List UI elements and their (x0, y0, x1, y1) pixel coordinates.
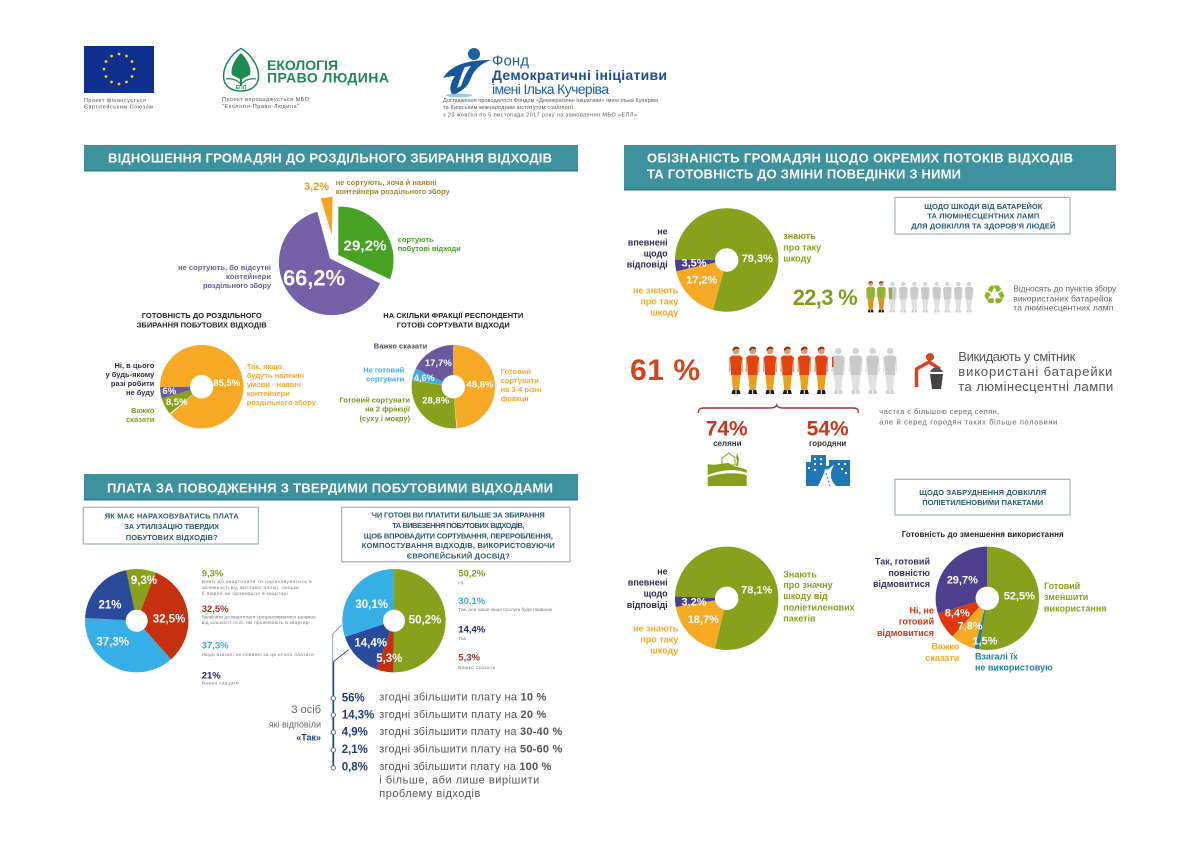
labels: battery harm pie: шкоду (783, 254, 811, 264)
chart: main exploded pie: 66,2% (283, 266, 345, 290)
legend: fee charging: 9,3% (202, 568, 224, 580)
list: agreement to raise the fee: 2,1% (342, 744, 368, 756)
labels: main pie: контейнери (226, 272, 271, 281)
labels: readiness donut: контейнери (247, 389, 290, 398)
text: take to collection points: та люмінесцентних ламп (1013, 302, 1114, 312)
question box: how fee should be charged (83, 507, 258, 544)
stat: villagers: 74% (706, 418, 748, 440)
legend: ready to pay: 14,4% (458, 624, 486, 636)
chart: fractions donut: 48,8% (467, 380, 494, 390)
chart: readiness donut (162, 349, 241, 424)
chart: reduce use pie: 1,5% (972, 636, 998, 648)
question box: ready to pay more: ЄВРОПЕЙСЬКИЙ ДОСВІД? (407, 552, 510, 560)
logo: Democratic Initiatives Foundation: Дослідження проводилося Фондом «Демократичні Ініціативи» імені Ілька Кучеріва (443, 98, 659, 104)
question box: batteries and lamps (895, 197, 1070, 234)
list: agreement to raise the fee: згодні збільшити плату на 30-40 % (379, 726, 563, 738)
labels: plastic bag harm pie: відповіді (627, 600, 668, 610)
labels: reduce use pie: відмовитися (873, 579, 930, 589)
labels: plastic bag harm pie (627, 567, 855, 656)
labels: main pie: контейнери роздільного збору (336, 187, 451, 196)
chart: plastic bag harm pie: 78,1% (741, 585, 773, 597)
heading: attitude to separate collection (84, 145, 578, 172)
label: of those who answered yes (269, 704, 321, 742)
legend: ready to pay: 30,1% (458, 596, 486, 607)
question box: ready to pay more (342, 507, 570, 562)
heading: readiness for separate collection: ЗБИРАННЯ ПОБУТОВИХ ВІДХОДІВ (137, 320, 267, 330)
stat: villagers: селяни (713, 439, 742, 448)
labels: battery harm pie: про таку (783, 242, 821, 252)
legend: ready to pay: Важко сказати (458, 665, 496, 671)
list: agreement to raise the fee: 0,8% (342, 762, 368, 774)
list: agreement to raise the fee: згодні збільшити плату на 50-60 % (379, 744, 563, 756)
heading: awareness about waste streams (624, 145, 1116, 190)
legend: ready to pay (458, 568, 553, 671)
list: agreement to raise the fee: згодні збільшити плату на 20 % (379, 709, 547, 721)
label: of those who answered yes: «Так» (296, 732, 321, 742)
text: share note: але й серед городян таких більше половини (879, 418, 1057, 426)
chart: plastic bag harm pie: 3,2% (681, 596, 707, 608)
labels: reduce use pie: Важко (932, 642, 960, 652)
labels: main pie: роздільного збору (203, 281, 272, 290)
logo: Democratic Initiatives Foundation: Демократичні ініціативи (492, 67, 667, 83)
legend: fee charging: Включити до квартплати і розраховуватися залежно (202, 614, 316, 620)
labels: readiness donut (106, 361, 317, 424)
legend: fee charging: Люди взагалі не повинні за це нічого платити (202, 652, 314, 658)
legend: fee charging: 21% (202, 670, 221, 682)
labels: main pie: не сортують, хоча й наявні (336, 178, 437, 187)
chart: battery harm awareness pie: 79,3% (742, 253, 773, 265)
labels: reduce use pie: готовий (899, 617, 934, 627)
labels: battery harm pie: шкоду (650, 307, 678, 317)
labels: reduce use pie: використання (1044, 603, 1107, 613)
labels: battery harm pie: про таку (640, 297, 678, 307)
logo: European Union: Проект фінансується (84, 98, 146, 104)
question box: batteries and lamps: ЩОДО ШКОДИ ВІД БАТАРЕЙОК (924, 202, 1043, 211)
heading: number of fractions: НА СКІЛЬКИ ФРАКЦІЇ РЕСПОНДЕНТИ (383, 311, 523, 320)
question box: ready to pay more: ТА ВИВЕЗЕННЯ ПОБУТОВИХ ВІДХОДІВ, (392, 521, 524, 530)
question box: ready to pay more: ЧИ ГОТОВІ ВИ ПЛАТИТИ БІЛЬШЕ ЗА ЗБИРАННЯ (372, 510, 545, 520)
list: agreement to raise the fee: і більше, аби лише вирішити (379, 775, 539, 787)
label: of those who answered yes: З осіб (291, 704, 321, 716)
text: share note: частка є більшою серед селян, (879, 407, 999, 416)
labels: battery harm pie: впевнені (628, 238, 668, 248)
logo: Ecology Law Human: ЕКОЛОГІЯ (267, 57, 338, 73)
labels: readiness donut: роздільного збору (247, 398, 317, 407)
chart: fee charging pie: 21% (98, 600, 122, 612)
heading: readiness for separate collection (137, 311, 267, 330)
labels: fractions donut (339, 342, 541, 423)
list: agreement to raise the fee: згодні збільшити плату на 100 % (379, 761, 552, 773)
list: agreement to raise the fee: 14,3% (342, 710, 374, 722)
chart: plastic bag harm pie: 18,7% (688, 614, 719, 626)
pictogram: 61 percent of people (729, 347, 897, 394)
question box: how fee should be charged: ЗА УТИЛІЗАЦІЮ ТВЕРДИХ (124, 522, 219, 531)
labels: battery harm pie: не знають (633, 286, 679, 296)
labels: plastic bag harm pie: поліетиленових (783, 602, 855, 612)
labels: readiness donut: не буду (126, 388, 155, 397)
labels: reduce use pie (873, 557, 1107, 673)
labels: main pie: 3,2% (304, 181, 329, 193)
legend: ready to pay: Так, але лише якщо послуга буде наявною (458, 607, 553, 613)
labels: fractions donut: на 2 фракції (365, 404, 411, 414)
pictogram: 22.3 percent of people (866, 281, 974, 312)
labels: plastic bag harm pie: щодо (644, 589, 668, 599)
labels: main pie (178, 178, 461, 290)
labels: readiness donut: сказати (126, 415, 155, 424)
logo: Ecology Law Human: ЕПЛ (236, 85, 247, 91)
labels: readiness donut: умови - наявні (247, 380, 301, 389)
logo: European Union: Європейським Союзом (84, 104, 153, 110)
question box: how fee should be charged: ПОБУТОВИХ ВІДХОДІВ? (126, 533, 218, 542)
labels: fractions donut: Важко сказати (374, 342, 428, 350)
chart: ready to pay pie: 50,2% (409, 615, 441, 627)
heading: readiness to reduce use: Готовність до зменшення використання (902, 530, 1064, 539)
chart: reduce use pie: 52,5% (1004, 591, 1035, 603)
labels: plastic bag harm pie: шкоду від (783, 591, 828, 601)
labels: main pie: не сортують, бо відсутні (178, 263, 271, 272)
labels: battery harm pie: не (657, 226, 668, 236)
chart: fee charging pie (92, 575, 185, 665)
labels: plastic bag harm pie: не знають (633, 623, 679, 633)
legend: fee charging: залежності від житлової площі, скільки (202, 585, 299, 591)
labels: reduce use pie: Взагалі їх (975, 652, 1018, 662)
question box: ready to pay more: ЩОБ ВПРОВАДИТИ СОРТУВАННЯ, ПЕРЕРОБЛЕННЯ, (364, 532, 553, 540)
legend: fee charging: 32,5% (202, 604, 229, 615)
stat: city dwellers: 54% (807, 418, 849, 440)
question box: ready to pay more: КОМПОСТУВАННЯ ВІДХОДІВ, ВИКОРИСТОВУЮЧИ (362, 541, 555, 550)
chart: main exploded pie: 29,2% (344, 238, 386, 254)
chart: ready to pay pie: 5,3% (376, 653, 402, 665)
chart: readiness donut: 6% (162, 386, 177, 397)
question box: plastic bags: ПОЛІЕТИЛЕНОВИМИ ПАКЕТАМИ (922, 498, 1043, 507)
logo: Democratic Initiatives Foundation (443, 48, 667, 118)
question box: how fee should be charged: ЯК МАЄ НАРАХОВУВАТИСЬ ПЛАТА (105, 512, 239, 520)
labels: plastic bag harm pie: про значну (783, 580, 833, 590)
question box: batteries and lamps: ДЛЯ ДОВКІЛЛЯ ТА ЗДОРОВ'Я ЛЮДЕЙ (911, 222, 1055, 230)
chart: battery harm awareness pie: 3,5% (681, 257, 707, 269)
chart: readiness donut: 8,5% (166, 397, 188, 408)
chart: fractions donut: 4,6% (414, 373, 435, 383)
legend: fee charging (202, 568, 316, 686)
chart: plastic bag harm pie (681, 560, 773, 636)
labels: plastic bag harm pie: Знають (783, 569, 817, 579)
text: share note (879, 407, 1057, 426)
heading: readiness for separate collection: ГОТОВНІСТЬ ДО РОЗДІЛЬНОГО (142, 311, 262, 320)
chart: ready to pay pie: 14,4% (354, 637, 387, 649)
chart: reduce use pie: 29,7% (947, 575, 978, 587)
icon: city (806, 455, 850, 486)
chart: fee charging pie: 9,3% (131, 575, 157, 587)
labels: fractions donut: Готовий сортувати (339, 396, 410, 404)
stat: city dwellers: городяни (809, 439, 846, 448)
text: throw batteries in the bin: Викидають у смітник (958, 349, 1076, 364)
labels: battery harm pie: знають (783, 231, 816, 241)
list: agreement to raise the fee: 56% (342, 692, 365, 704)
list: agreement to raise the fee: згодні збільшити плату на 10 % (379, 692, 547, 704)
chart: battery harm awareness pie: 17,2% (686, 275, 718, 287)
labels: battery harm pie: відповіді (627, 259, 668, 269)
logo: Ecology Law Human: ПРАВО ЛЮДИНА (267, 70, 389, 86)
logo: European Union (84, 46, 154, 110)
text: take to collection points (1013, 283, 1117, 312)
labels: reduce use pie: Так, готовий (875, 557, 930, 567)
labels: reduce use pie: відмовитися (877, 628, 934, 638)
labels: main pie: побутові відходи (398, 244, 461, 253)
logo: Ecology Law Human: Проект впроваджується МБО (222, 97, 310, 103)
chart: fee charging pie: 32,5% (153, 613, 185, 625)
labels: plastic bag harm pie: шкоду (650, 646, 678, 656)
heading: awareness about waste streams: ТА ГОТОВНІСТЬ ДО ЗМІНИ ПОВЕДІНКИ З НИМИ (647, 166, 961, 182)
labels: fractions donut: на 3-4 різні (501, 385, 541, 394)
labels: reduce use pie: не використовую (975, 663, 1053, 673)
legend: ready to pay: 50,2% (458, 568, 486, 580)
icon: throwing into a bin (916, 353, 943, 389)
labels: fractions donut: Готовий (501, 367, 531, 376)
labels: reduce use pie: повністю (888, 568, 930, 578)
chart: readiness donut: 85,5% (213, 378, 241, 389)
heading: fee for solid waste: ПЛАТА ЗА ПОВОДЖЕННЯ З ТВЕРДИМИ ПОБУТОВИМИ ВІДХОДАМИ (107, 480, 553, 496)
labels: plastic bag harm pie: про таку (640, 634, 678, 644)
text: throw batteries in the bin (958, 349, 1113, 394)
text: take to collection points: Відносять до пунктів збору (1013, 283, 1117, 293)
labels: battery harm pie (627, 226, 821, 317)
labels: reduce use pie: зменшити (1044, 592, 1088, 602)
question box: plastic bags: ЩОДО ЗАБРУДНЕННЯ ДОВКІЛЛЯ (919, 488, 1046, 497)
logo: Democratic Initiatives Foundation: імені Ілька Кучеріва (492, 81, 609, 97)
labels: plastic bag harm pie: не (657, 567, 668, 577)
labels: fractions donut: Не готовий (363, 366, 405, 374)
logo: Democratic Initiatives Foundation: з 23 жовтня по 5 листопада 2017 року на замовлення МБО «ЕПЛ» (443, 112, 637, 118)
legend: ready to pay: Ні (458, 580, 463, 586)
legend: fee charging: від кількості осіб, які проживають в квартирі (202, 620, 310, 626)
labels: reduce use pie: Ні, не (910, 606, 934, 616)
labels: readiness donut: будуть належні (247, 371, 304, 380)
heading: number of fractions (383, 311, 523, 330)
icon: recycling: ♻ (982, 280, 1006, 312)
legend: fee charging: Вивіз до квартплати та нараховуватись в (202, 579, 312, 585)
labels: reduce use pie: Готовий (1044, 581, 1080, 591)
legend: fee charging: Важко сказати (202, 680, 239, 686)
connector: pie to increase list (331, 625, 348, 770)
heading: fee for solid waste (84, 474, 578, 500)
chart: reduce use pie: 8,4% (945, 607, 970, 619)
heading: number of fractions: ГОТОВІ СОРТУВАТИ ВІДХОДИ (397, 320, 510, 330)
text: take to collection points: використаних батарейок (1013, 293, 1113, 303)
labels: main pie: сортують (398, 235, 434, 244)
labels: fractions donut: фракції (501, 394, 529, 403)
chart: reduce use pie: 7,8% (957, 621, 983, 633)
stat: 22.3 percent: 22,3 % (793, 285, 858, 310)
icon: village (708, 453, 747, 486)
question box: batteries and lamps: ТА ЛЮМІНЕСЦЕНТНИХ ЛАМП (927, 212, 1039, 220)
chart: fractions donut: 17,7% (425, 358, 452, 369)
chart: fractions donut (414, 351, 494, 422)
legend: fee charging: 37,3% (202, 640, 229, 652)
logo: Democratic Initiatives Foundation: та Київським міжнародним інститутом соціології (443, 105, 573, 111)
logo: Ecology Law Human: "Екологія-Право-Людина" (222, 104, 299, 110)
logo: Democratic Initiatives Foundation: Фонд (492, 52, 529, 70)
labels: readiness donut: Так, якщо (247, 362, 283, 371)
legend: fee charging: б людей не проживало в квартирі (202, 590, 288, 597)
labels: fractions donut: сортувати (366, 374, 405, 384)
labels: readiness donut: Важко (131, 406, 155, 415)
logo: Ecology Law Human (222, 48, 389, 110)
labels: reduce use pie: сказати (925, 653, 959, 663)
labels: plastic bag harm pie: пакетів (783, 613, 816, 623)
labels: fractions donut: сортувати (501, 376, 539, 385)
legend: ready to pay: Так (458, 636, 467, 642)
chart: fee charging pie: 37,3% (96, 637, 129, 649)
chart: fractions donut: 28,8% (422, 396, 450, 406)
stat: 61 percent: 61 % (630, 354, 700, 387)
chart: reduce use pie (943, 554, 1035, 648)
chart: ready to pay pie: 30,1% (355, 599, 388, 611)
question box: plastic bags (895, 479, 1070, 515)
labels: plastic bag harm pie: впевнені (628, 578, 668, 588)
chart: battery harm awareness pie (681, 221, 773, 299)
labels: readiness donut: Ні, в цього (115, 361, 155, 370)
legend: ready to pay: 5,3% (458, 652, 481, 664)
text: throw batteries in the bin: використані батарейки (958, 364, 1112, 379)
text: throw batteries in the bin: та люмінесцентні лампи (958, 379, 1113, 394)
labels: fractions donut: (суху і мокру) (359, 414, 410, 423)
list: agreement to raise the fee: проблему відходів (379, 788, 480, 800)
list: agreement to raise the fee (342, 692, 563, 800)
brace: villagers and city dwellers (698, 405, 858, 413)
label: of those who answered yes: які відповіли (269, 719, 321, 729)
heading: attitude to separate collection: ВІДНОШЕННЯ ГРОМАДЯН ДО РОЗДІЛЬНОГО ЗБИРАННЯ ВІДХОДІВ (108, 150, 552, 166)
heading: awareness about waste streams: ОБІЗНАНІСТЬ ГРОМАДЯН ЩОДО ОКРЕМИХ ПОТОКІВ ВІДХОДІВ (647, 150, 1073, 166)
chart: ready to pay pie (354, 581, 441, 665)
list: agreement to raise the fee: 4,9% (342, 726, 368, 738)
chart: main exploded pie (279, 197, 394, 315)
labels: readiness donut: у будь-якому (106, 370, 155, 379)
labels: battery harm pie: щодо (644, 248, 668, 258)
labels: readiness donut: разі робити (111, 379, 155, 388)
